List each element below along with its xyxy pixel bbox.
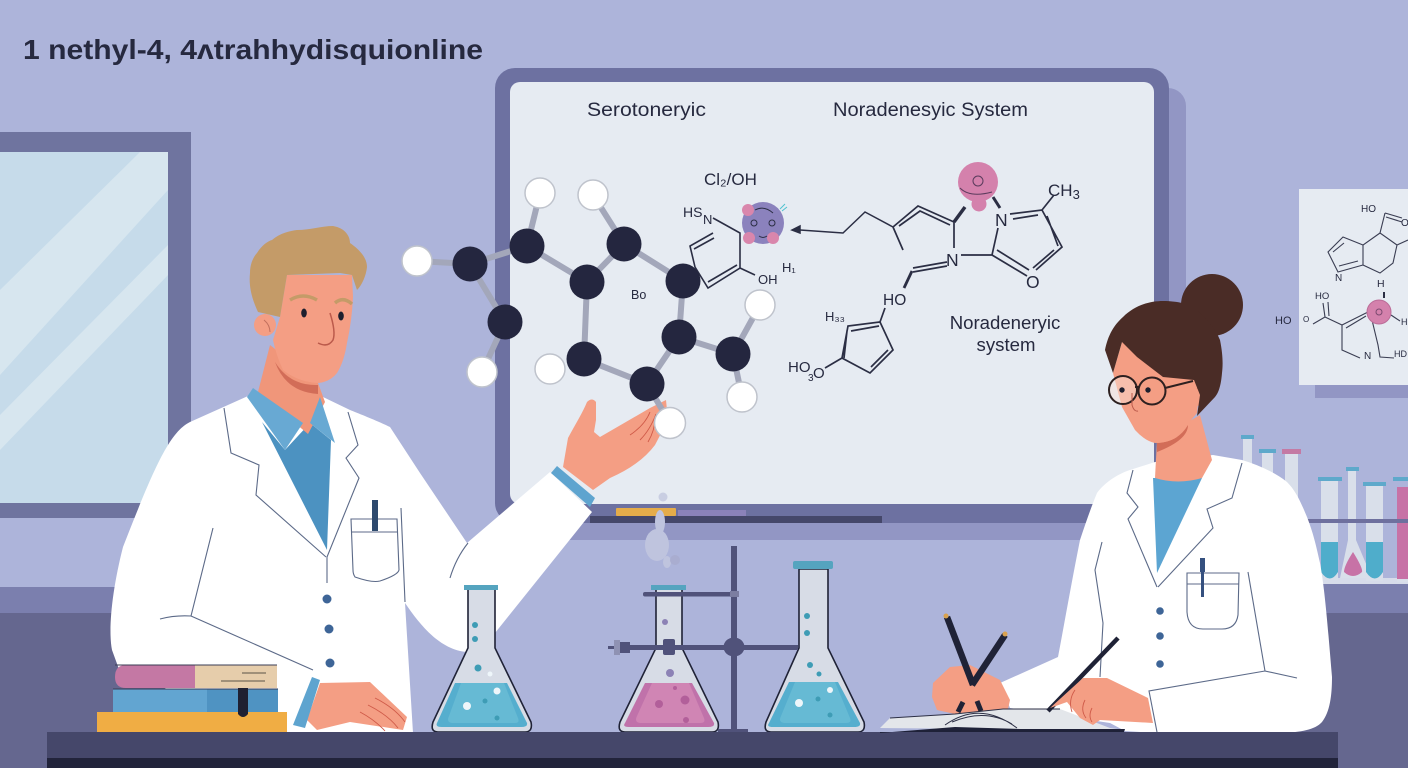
man lower cuff — [293, 677, 320, 728]
label: noradeneryic system — [950, 312, 1060, 355]
title: 1 nethyl-4, 4ʌtrahhydisquionline — [23, 34, 483, 65]
test tubes — [1241, 435, 1408, 584]
poster: HO — [1315, 291, 1329, 302]
woman right pen — [1048, 638, 1118, 711]
books — [97, 665, 287, 733]
woman hands and pens — [944, 614, 1153, 725]
chemical structure: right: HO — [788, 359, 810, 376]
label: noradenesyic system: Noradenesyic System — [833, 100, 1028, 121]
whiteboard — [495, 68, 1186, 540]
man lab coat — [110, 396, 592, 733]
man neck — [258, 345, 325, 434]
retort stand — [608, 546, 798, 733]
woman right hand — [1050, 678, 1153, 725]
chemical structure: right: HO — [883, 292, 906, 309]
pens in left hand — [944, 614, 1008, 712]
flask: blue right — [765, 561, 864, 732]
flask: blue left — [432, 585, 531, 732]
icon: purple face atom — [742, 202, 787, 244]
man shirt — [262, 422, 331, 550]
poster: N — [1335, 273, 1342, 284]
scientist: man — [110, 226, 668, 733]
poster: HO — [1361, 204, 1376, 215]
chemical structure: right — [788, 162, 1080, 384]
label: Bo: Bo — [631, 288, 646, 302]
man coat details — [160, 408, 468, 670]
flask: pink middle — [619, 585, 718, 732]
chemical structure: right: N — [946, 250, 959, 270]
chemical structure: right: CH — [1048, 181, 1073, 200]
man raised hand — [563, 400, 668, 490]
woman glasses — [1109, 376, 1193, 404]
icon: pink atom — [958, 162, 998, 212]
chemical structure: left ring: H₁ — [782, 260, 796, 275]
poster: H — [1377, 278, 1385, 290]
smoke — [645, 492, 680, 568]
woman shirt — [1153, 478, 1202, 573]
woman left hand — [932, 665, 1010, 714]
man lower hand — [307, 682, 407, 730]
chemical structure: right: H₃₃ — [825, 309, 845, 324]
poster: HD — [1394, 349, 1407, 359]
man collar — [247, 388, 335, 450]
poster — [1275, 189, 1408, 398]
woman collar lines — [1095, 463, 1297, 732]
woman neck — [1155, 415, 1212, 482]
chemical structure: left ring — [683, 170, 796, 288]
label: serotoneryic: Serotoneryic — [587, 100, 706, 121]
poster: N — [1364, 351, 1371, 362]
chemical structure: right: 3 — [1073, 187, 1080, 202]
ball and stick molecule — [402, 178, 775, 438]
label: noradeneryic system: Noradeneryic — [950, 312, 1060, 333]
poster: HO — [1275, 315, 1292, 327]
chemical structure: left ring: HS — [683, 204, 702, 220]
poster: H — [1401, 317, 1408, 327]
notebook — [880, 709, 1125, 733]
whiteboard tray — [590, 508, 882, 523]
chemical structure: left ring: Cl₂/OH — [704, 170, 757, 189]
man head — [273, 275, 353, 383]
window — [0, 132, 191, 518]
table — [47, 732, 1338, 768]
chemical structure: left ring: OH — [758, 272, 778, 287]
woman head — [1113, 342, 1200, 443]
woman hair — [1105, 274, 1243, 416]
arrow — [792, 212, 893, 233]
chemical structure: left ring: N — [703, 212, 712, 227]
scientist: woman — [932, 274, 1332, 733]
poster: O — [1303, 315, 1309, 324]
chemical structure: right: N — [995, 210, 1008, 230]
label: noradeneryic system: system — [977, 334, 1035, 355]
woman lab coat — [1000, 455, 1332, 733]
icon: pink atom small — [1367, 300, 1391, 324]
man raised cuff — [551, 466, 595, 507]
man hair — [250, 226, 367, 317]
chemical structure: right: O — [1026, 272, 1040, 292]
chemical structure: right: O — [813, 365, 825, 382]
chemical structure: right: 3 — [808, 373, 814, 384]
